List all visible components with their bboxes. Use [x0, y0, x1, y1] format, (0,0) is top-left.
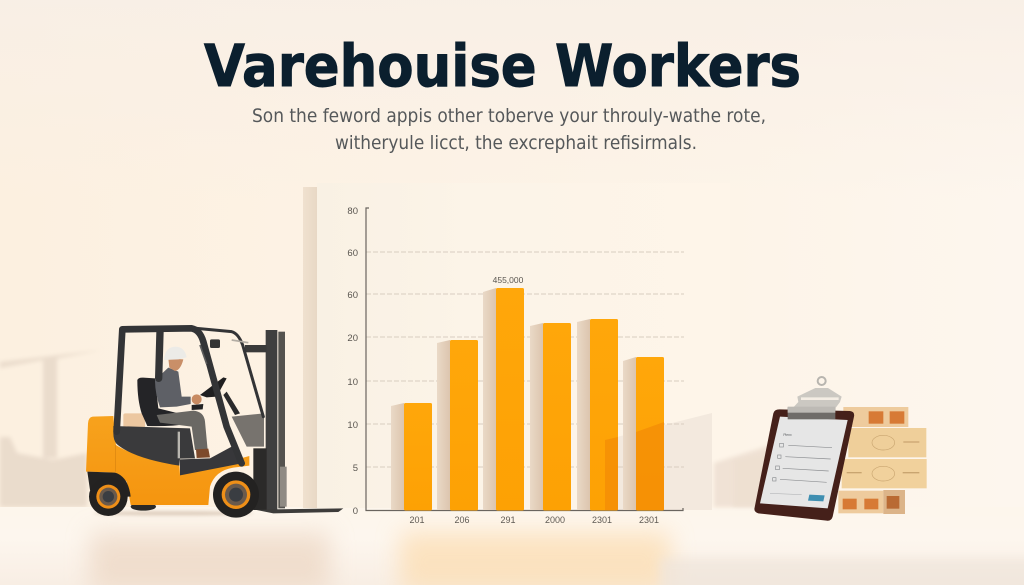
x axis labels: 2301 [592, 515, 612, 525]
y axis labels: 60 [347, 248, 358, 259]
y axis labels: 10 [347, 420, 358, 431]
bar chart [347, 206, 684, 525]
bars [404, 288, 664, 510]
floor [0, 507, 1024, 585]
x axis labels: 201 [409, 515, 425, 525]
seat [137, 378, 188, 426]
y axis labels: 20 [347, 333, 358, 344]
hand [192, 394, 202, 404]
checklist [770, 443, 832, 495]
far wheel [131, 503, 156, 511]
y axis labels: 10 [347, 377, 358, 388]
x axis labels: 2301 [639, 515, 659, 525]
bar shadows [391, 288, 636, 510]
rear wheel [89, 477, 128, 516]
panel: chart backing board [303, 183, 770, 510]
ground shadow [93, 511, 253, 516]
x axis labels: 2000 [545, 515, 565, 525]
top pallet [843, 407, 908, 427]
hard hat [164, 347, 187, 360]
x axis labels: 291 [500, 515, 516, 525]
x axis labels: 206 [454, 515, 470, 525]
shadow across last bars [605, 422, 664, 510]
y axis labels [347, 206, 358, 517]
forklift [86, 328, 343, 518]
subtitle [252, 105, 766, 154]
wall shadow [733, 450, 773, 507]
clip [818, 377, 826, 385]
box on rear deck [123, 413, 145, 428]
cab frame [117, 328, 263, 463]
clipboard [754, 377, 854, 521]
orange body [86, 416, 249, 505]
y axis labels: 0 [353, 506, 358, 517]
x axis labels [409, 515, 659, 525]
driver [155, 347, 210, 458]
dark cowl [113, 426, 195, 466]
legs [157, 411, 208, 450]
bottom pallet [838, 490, 905, 514]
wall shadow left [0, 350, 102, 507]
wheel arch [87, 472, 131, 497]
torso [155, 368, 191, 407]
lower box [842, 459, 927, 488]
subtitle: witheryule licct, the excrephait refisirmals. [335, 132, 697, 154]
steering wheel [200, 377, 227, 397]
y axis labels: 5 [353, 463, 358, 474]
mast [245, 330, 287, 510]
subtitle: Son the feword appis other toberve your throuly-wathe rote, [252, 105, 766, 127]
forks [257, 508, 343, 513]
y axis labels: 60 [347, 290, 358, 301]
gridlines and axes [366, 208, 684, 510]
value label: 455,000 [493, 275, 524, 285]
engine block [232, 413, 264, 447]
upper box [848, 428, 926, 457]
head [168, 358, 183, 371]
pallets and boxes [733, 377, 927, 521]
front wheel [213, 472, 259, 518]
y axis labels: 80 [347, 206, 358, 217]
clipboard: Plenx [783, 433, 792, 437]
title: Varehouise Workers [204, 32, 801, 100]
